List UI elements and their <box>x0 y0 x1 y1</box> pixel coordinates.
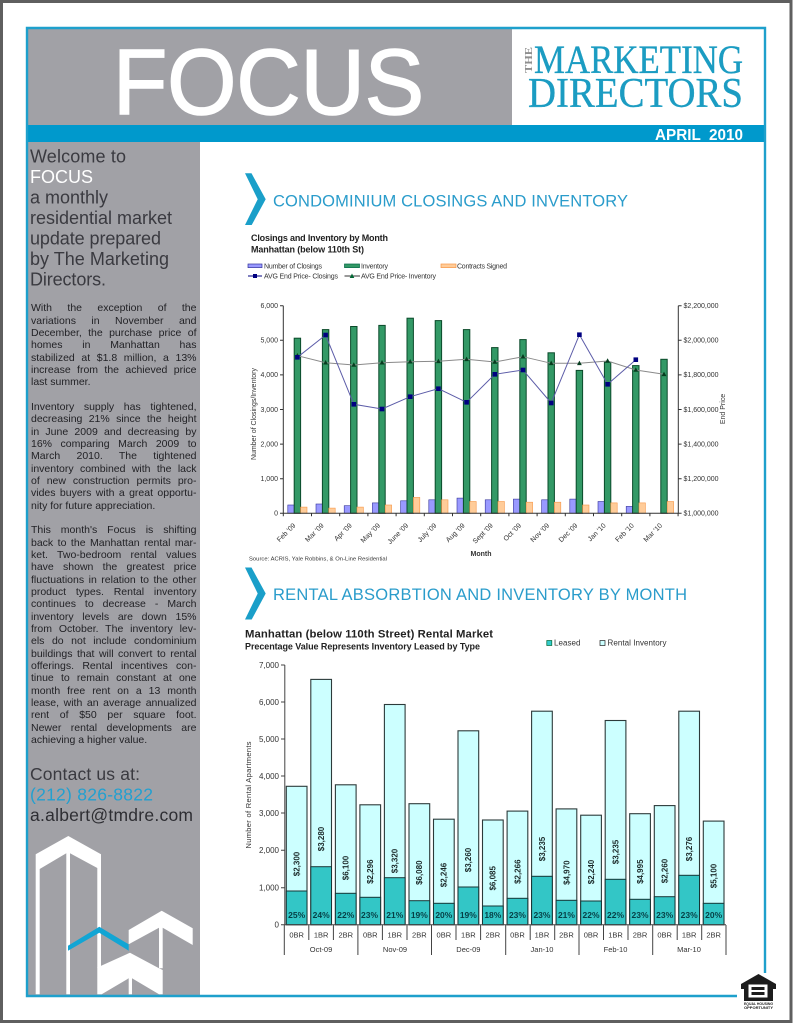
chart legend: Number of Closings <box>264 264 322 270</box>
chart legend: AVG End Price- Inventory <box>361 274 436 280</box>
average rent labels: $2,260 <box>660 858 670 883</box>
percent leased labels: 25% <box>288 910 306 920</box>
right axis labels <box>684 303 719 518</box>
month labels: Nov '09 <box>530 522 551 544</box>
y axis labels: 1,000 <box>259 884 280 892</box>
section heading: rental absorption <box>245 568 687 620</box>
right axis labels: $2,200,000 <box>684 303 719 310</box>
bedroom type labels: 2BR <box>559 930 574 940</box>
month labels: June '09 <box>387 522 410 546</box>
y axis labels: 0 <box>275 920 280 930</box>
month labels: Aug '09 <box>445 522 467 544</box>
month labels: Feb '10 <box>615 522 636 544</box>
title: FOCUS: FOCUS <box>113 30 424 134</box>
sidebar body text: With the exception of the <box>31 302 196 314</box>
percent leased labels: 23% <box>533 910 551 920</box>
chart legend: AVG End Price- Closings <box>264 274 338 280</box>
chart title <box>245 628 493 652</box>
percent leased labels: 23% <box>656 910 674 920</box>
icon: chevron <box>245 568 266 620</box>
percent leased labels: 23% <box>361 910 378 920</box>
sidebar body text: els do not include condominium <box>31 635 196 647</box>
sidebar intro heading: by The Marketing <box>30 249 169 269</box>
sidebar intro heading: a monthly <box>30 188 108 208</box>
bedroom type labels: 2BR <box>633 930 648 940</box>
average rent labels: $2,246 <box>440 862 449 887</box>
average rent labels: $3,235 <box>611 839 620 864</box>
left axis labels <box>260 303 278 518</box>
sidebar intro heading: update prepared <box>30 228 161 248</box>
average rent labels: $3,260 <box>464 847 473 872</box>
header panel <box>28 29 765 144</box>
sidebar body text: achieving a higher value. <box>31 734 147 746</box>
sidebar body text: from October. The inventory lev- <box>31 623 196 635</box>
contact block: a.albert@tmdre.com <box>30 805 193 825</box>
sidebar body text: homes in Manhattan has <box>31 339 196 351</box>
bedroom type labels: 2BR <box>706 930 722 940</box>
sidebar body text <box>31 302 197 746</box>
sidebar body text: in June 2009 and decreasing by <box>31 426 196 438</box>
chart title: Manhattan (below 110th Street) Rental Market <box>245 628 493 640</box>
bedroom type labels: 0BR <box>363 930 378 940</box>
average rent labels: $2,266 <box>513 859 522 884</box>
chart legend <box>248 264 507 280</box>
average rent labels <box>292 826 718 891</box>
average rent labels: $6,085 <box>489 866 498 891</box>
bedroom type labels: 0BR <box>510 930 525 940</box>
month labels: Mar '10 <box>643 522 664 544</box>
percent leased labels <box>288 910 723 920</box>
average rent labels: $6,080 <box>415 860 424 885</box>
bedroom type labels: 1BR <box>314 930 329 940</box>
sidebar body text: offerings. Rental incentives con- <box>31 660 196 672</box>
chart legend: Leased <box>554 638 580 648</box>
y axis labels: 7,000 <box>259 661 280 670</box>
average rent labels: $2,300 <box>292 851 302 876</box>
month labels: May '09 <box>360 522 382 545</box>
sidebar intro heading: residential market <box>30 208 172 228</box>
header grey block <box>28 29 512 125</box>
logo: The Marketing Directors: MARKETING <box>534 37 743 82</box>
percent leased labels: 19% <box>411 910 428 920</box>
bedroom type labels: 1BR <box>535 930 550 940</box>
bedroom type labels: 0BR <box>437 930 452 940</box>
month labels: Oct '09 <box>503 522 523 543</box>
bedroom type labels: 2BR <box>412 930 427 940</box>
bedroom type labels: 0BR <box>289 930 305 940</box>
chart legend: Rental Inventory <box>608 638 666 648</box>
left axis labels: 3,000 <box>260 407 278 414</box>
month group labels: Dec-09 <box>456 945 480 954</box>
sidebar body text: This month's Focus is shifting <box>31 524 196 536</box>
right axis labels: $1,200,000 <box>684 476 719 483</box>
icon: buildings logo <box>36 836 193 994</box>
percent leased labels: 20% <box>705 910 723 920</box>
y axis labels: 2,000 <box>259 846 280 855</box>
sidebar intro heading: Welcome to <box>30 146 126 166</box>
axis titles: Number of Closings/Inventory <box>251 368 258 460</box>
sidebar body text: March 2010. The tightened <box>31 450 196 462</box>
sidebar body text: 16% comparing March 2009 to <box>31 438 196 450</box>
logo: The Marketing Directors: DIRECTORS <box>528 71 743 117</box>
axis titles <box>251 368 727 558</box>
month labels: July '09 <box>417 522 438 544</box>
contact block: Contact us at: <box>30 764 140 784</box>
chart: closings and inventory by month <box>248 233 727 562</box>
sidebar body text: nity for future appreciation. <box>31 500 155 512</box>
sidebar body text: tinue to remain constant at one <box>31 672 196 684</box>
left axis labels: 1,000 <box>260 476 278 483</box>
sidebar intro heading: FOCUS <box>30 167 93 187</box>
sidebar body text: Inventory supply has tightened, <box>31 401 196 413</box>
bedroom type labels: 1BR <box>461 930 476 940</box>
bedroom type labels <box>289 930 722 940</box>
icon: equal housing <box>741 974 776 1010</box>
sidebar body text: increase from the achieved price <box>31 364 196 376</box>
month group labels: Mar-10 <box>677 945 701 954</box>
sidebar body text: of new construction permits pro- <box>31 475 196 487</box>
percent leased labels: 20% <box>435 910 453 920</box>
left axis labels: 0 <box>274 511 278 518</box>
sidebar body text: Newer rental developments are <box>31 722 196 734</box>
month labels: Apr '09 <box>333 522 354 543</box>
date band <box>28 125 765 142</box>
percent leased labels: 23% <box>632 910 649 920</box>
average end price inventory line <box>295 353 666 376</box>
sidebar body text: continues to decrease - March <box>31 598 196 610</box>
percent leased labels: 18% <box>484 910 502 920</box>
sidebar body text: buildings that will convert to rental <box>31 648 196 660</box>
sidebar body text: inventory levels are down 15% <box>31 611 196 623</box>
contracts signed bars <box>301 497 674 513</box>
icon: equal housing: OPPORTUNITY <box>744 1005 773 1010</box>
average rent labels: $3,320 <box>391 848 400 873</box>
right axis labels: $1,400,000 <box>684 441 719 448</box>
leased bars <box>286 867 724 925</box>
month group labels: Nov-09 <box>383 945 407 954</box>
logo: The Marketing Directors <box>524 37 743 117</box>
logo: The Marketing Directors: THE <box>524 47 535 73</box>
percent leased labels: 21% <box>386 910 404 920</box>
sidebar body text: stabilized at $1.8 million, a 13% <box>31 352 196 364</box>
sidebar body text: have shown the greatest price <box>31 561 196 573</box>
sidebar intro heading <box>30 146 172 290</box>
section heading: condominium closings <box>245 173 628 225</box>
percent leased labels: 22% <box>583 910 600 920</box>
sidebar body text: lease, with an average annualized <box>31 697 196 709</box>
chart title: Precentage Value Represents Inventory Leased by Type <box>245 642 480 652</box>
percent leased labels: 22% <box>337 910 355 920</box>
average rent labels: $2,240 <box>587 859 596 884</box>
month group labels: Oct-09 <box>310 945 332 954</box>
sidebar body text: vides buyers with a great opportu- <box>31 487 196 499</box>
sidebar body text: inventory combined with the lack <box>31 463 196 475</box>
y axis title: Number of Rental Apartments <box>244 741 253 848</box>
axis titles: Month <box>470 551 492 558</box>
sidebar body text: ket. Two-bedroom rental values <box>31 549 196 561</box>
percent leased labels: 21% <box>558 910 575 920</box>
sidebar body text: decreasing 21% since the height <box>31 413 196 425</box>
average rent labels: $4,970 <box>562 860 571 885</box>
average end price closings line <box>295 332 638 411</box>
inventory bars <box>294 318 667 513</box>
month labels: Dec '09 <box>558 522 579 544</box>
rental inventory bars <box>286 679 724 925</box>
chart title: Closings and Inventory by Month <box>251 233 388 243</box>
average rent labels: $4,995 <box>636 859 645 884</box>
right axis labels: $1,000,000 <box>684 511 719 518</box>
month labels: Mar '09 <box>304 522 326 544</box>
month labels: Jan '10 <box>587 522 608 543</box>
chart legend <box>547 638 666 648</box>
percent leased labels: 24% <box>313 910 330 920</box>
chart: rental market <box>244 628 726 955</box>
contact block: (212) 826-8822 <box>30 784 153 804</box>
y axis labels: 6,000 <box>259 698 280 707</box>
y axis labels: 5,000 <box>259 735 280 744</box>
sidebar body text: rent of $50 per square foot. <box>31 709 196 721</box>
chart legend: Contracts Signed <box>457 264 507 270</box>
bedroom type labels: 1BR <box>682 930 697 940</box>
percent leased labels: 19% <box>460 910 477 920</box>
percent leased labels: 22% <box>607 910 624 920</box>
sidebar body text: fluctuations in relation to the other <box>31 574 196 586</box>
sidebar body text: December, the purchase price of <box>31 327 196 339</box>
bedroom type labels: 1BR <box>608 930 623 940</box>
bedroom type labels: 2BR <box>486 930 501 940</box>
percent leased labels: 23% <box>681 910 698 920</box>
axis titles: End Price <box>720 394 727 424</box>
average rent labels: $3,280 <box>317 826 326 851</box>
bedroom type labels: 1BR <box>387 930 403 940</box>
sidebar intro heading: Directors. <box>30 270 106 290</box>
chart title <box>251 233 388 255</box>
icon: chevron <box>245 173 266 225</box>
y axis labels: 4,000 <box>259 772 280 781</box>
sidebar body text: variations in November and <box>31 315 196 327</box>
y axis labels: 3,000 <box>259 809 280 818</box>
source note: Source: ACRIS, Yale Robbins, & On-Line Residential <box>249 556 387 562</box>
average rent labels: $3,235 <box>538 836 547 861</box>
chart axes <box>280 306 682 516</box>
left axis labels: 5,000 <box>260 338 278 345</box>
section heading: condominium closings: CONDOMINIUM CLOSINGS AND INVENTORY <box>273 192 628 210</box>
sidebar body text: month free rent on a 13 month <box>31 685 196 697</box>
left axis labels: 2,000 <box>260 441 278 448</box>
contact block <box>30 764 193 825</box>
y axis labels <box>259 661 280 930</box>
icon: equal housing: EQUAL HOUSING <box>744 1001 773 1006</box>
chart axes <box>281 665 726 955</box>
right axis labels: $2,000,000 <box>684 338 719 345</box>
month group labels: Feb-10 <box>604 945 627 954</box>
chart legend: Inventory <box>361 264 388 270</box>
month group labels <box>310 945 701 954</box>
bedroom type labels: 0BR <box>584 930 599 940</box>
bedroom type labels: 0BR <box>657 930 673 940</box>
month group labels: Jan-10 <box>531 945 553 954</box>
sidebar panel <box>28 142 200 996</box>
left axis labels: 6,000 <box>260 303 278 310</box>
month labels: Feb '09 <box>276 522 297 544</box>
chart title: Manhattan (below 110th St) <box>251 245 364 255</box>
date: April 2010: APRIL 2010 <box>655 127 743 144</box>
percent leased labels: 23% <box>509 910 526 920</box>
left axis labels: 4,000 <box>260 372 278 379</box>
sidebar body text: product types. Rental inventory <box>31 586 196 598</box>
month labels <box>276 522 664 546</box>
right axis labels: $1,800,000 <box>684 372 719 379</box>
number of closings bars <box>288 498 633 513</box>
average rent labels: $3,276 <box>685 836 694 861</box>
average rent labels: $6,100 <box>342 855 351 880</box>
section heading: rental absorption: RENTAL ABSORBTION AND INVENTORY BY MONTH <box>273 586 687 604</box>
sidebar body text: back to the Manhattan rental mar- <box>31 537 196 549</box>
average rent labels: $5,100 <box>710 863 718 888</box>
bedroom type labels: 2BR <box>338 930 354 940</box>
average rent labels: $2,296 <box>366 859 375 884</box>
right axis labels: $1,600,000 <box>684 407 719 414</box>
month labels: Sept '09 <box>472 522 495 545</box>
sidebar body text: last summer. <box>31 376 91 388</box>
